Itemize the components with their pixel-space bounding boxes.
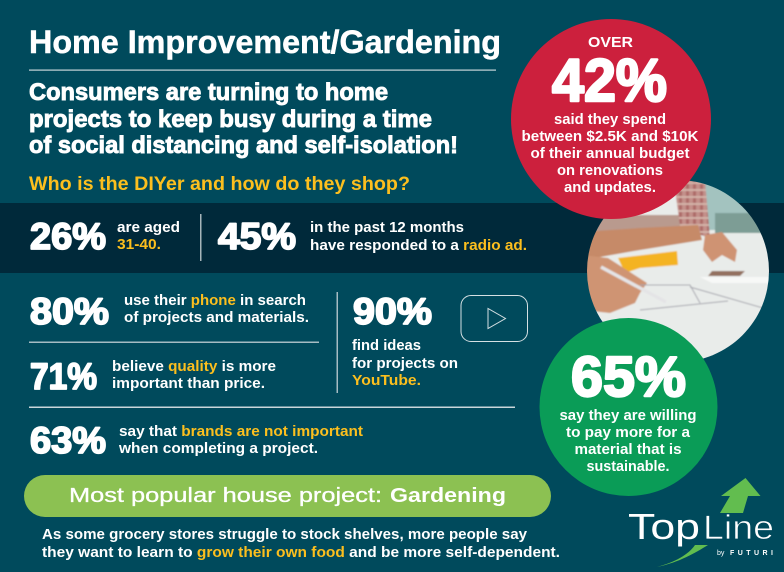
logo: TopLine by Futuri: by <box>717 550 725 557</box>
red callout: 42%: said they spend <box>554 111 666 128</box>
closing text <box>42 526 560 561</box>
green callout: 65%: sustainable. <box>586 458 670 475</box>
stat: 80% phone: of projects and materials. <box>124 309 309 326</box>
stat: 26% aged: 26% <box>30 215 106 257</box>
photo: hands over blueprints <box>587 180 769 358</box>
stat: 90% YouTube: for projects on <box>352 355 458 372</box>
stat: 45% radio ad: have responded to a radio ad. <box>310 237 527 254</box>
banner: most popular project <box>24 475 551 517</box>
icon: video play button <box>461 296 528 342</box>
green callout: 65%: say they are willing <box>560 407 696 424</box>
title: Home Improvement/Gardening <box>29 24 501 60</box>
stat: 80% phone <box>30 290 309 332</box>
stat: 71% quality: 71% <box>30 355 97 397</box>
subtitle <box>29 79 458 159</box>
dark stats band <box>0 203 784 273</box>
logo: TopLine by Futuri: Line <box>703 509 774 547</box>
green callout: 65% <box>540 318 718 496</box>
red callout: 42%: OVER <box>588 34 633 51</box>
green callout: 65%: to pay more for a <box>566 424 691 441</box>
red callout: 42%: 42% <box>552 47 667 114</box>
closing text: they want to learn to grow their own food and be more self-dependent. <box>42 544 560 561</box>
subtitle: projects to keep busy during a time <box>29 106 432 133</box>
stat: 63% brands: when completing a project. <box>118 440 318 457</box>
stat: 80% phone: use their phone in search <box>124 292 306 309</box>
stat: 26% aged <box>30 215 180 257</box>
stat: 80% phone: 80% <box>30 290 109 332</box>
logo: TopLine by Futuri: FUTURI <box>730 550 773 557</box>
stat: 90% YouTube: find ideas <box>352 337 421 354</box>
closing text: As some grocery stores struggle to stock shelves, more people say <box>42 526 528 543</box>
stat: 63% brands: 63% <box>30 419 106 461</box>
green callout: 65%: material that is <box>574 441 682 458</box>
question heading: Who is the DIYer and how do they shop? <box>29 173 410 195</box>
stat: 45% radio ad <box>218 215 527 257</box>
stat: 26% aged: are aged <box>117 219 180 236</box>
subtitle: of social distancing and self-isolation! <box>29 132 458 159</box>
red callout: 42%: between $2.5K and $10K <box>522 128 699 145</box>
green callout: 65%: 65% <box>571 345 686 409</box>
stat: 26% aged: 31-40. <box>117 236 161 253</box>
red callout: 42%: and updates. <box>564 179 656 196</box>
stat: 45% radio ad: in the past 12 months <box>310 219 464 236</box>
stat: 71% quality: important than price. <box>112 375 265 392</box>
banner: most popular project: Most popular house project: <box>69 484 382 507</box>
red callout: 42%: on renovations <box>557 162 663 179</box>
logo: TopLine by Futuri <box>628 478 774 567</box>
logo: TopLine by Futuri: Top <box>628 506 700 547</box>
red callout: 42% <box>511 19 711 219</box>
stat: 45% radio ad: 45% <box>218 215 296 257</box>
stat: 90% YouTube <box>352 290 458 389</box>
stat: 63% brands <box>30 419 363 461</box>
stat: 63% brands: say that brands are not important <box>119 423 363 440</box>
red callout: 42%: of their annual budget <box>530 145 690 162</box>
stat: 90% YouTube: YouTube. <box>352 372 421 389</box>
stat: 71% quality: believe quality is more <box>112 358 276 375</box>
stat: 90% YouTube: 90% <box>353 290 432 332</box>
subtitle: Consumers are turning to home <box>29 79 388 106</box>
banner: most popular project: Gardening <box>390 484 506 507</box>
stat: 71% quality <box>30 355 276 397</box>
